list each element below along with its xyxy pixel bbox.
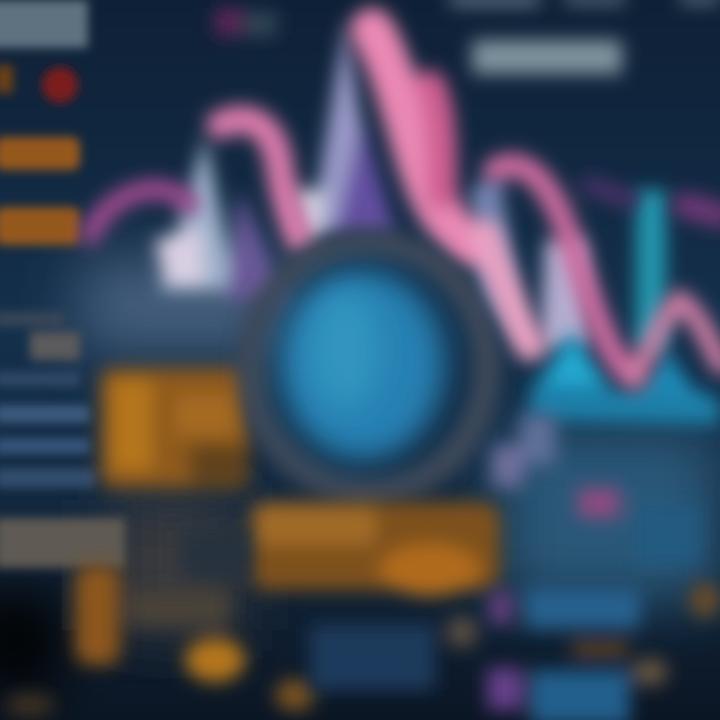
magnifying glass — [251, 243, 487, 491]
mid haze — [0, 260, 720, 690]
coin stack left — [100, 368, 250, 488]
lower-right chart blocks — [310, 415, 720, 720]
magnifier lens — [280, 270, 444, 460]
top text blur — [215, 0, 720, 74]
magnifier ring — [251, 243, 487, 491]
lower-left coins — [5, 530, 315, 717]
coin stack center — [250, 502, 500, 596]
pink line chart — [90, 30, 720, 378]
top-left ticker blocks — [0, 0, 88, 245]
teal area chart — [530, 190, 720, 425]
left stripes — [0, 312, 125, 568]
chart peaks: lilac and white fill — [155, 20, 590, 350]
